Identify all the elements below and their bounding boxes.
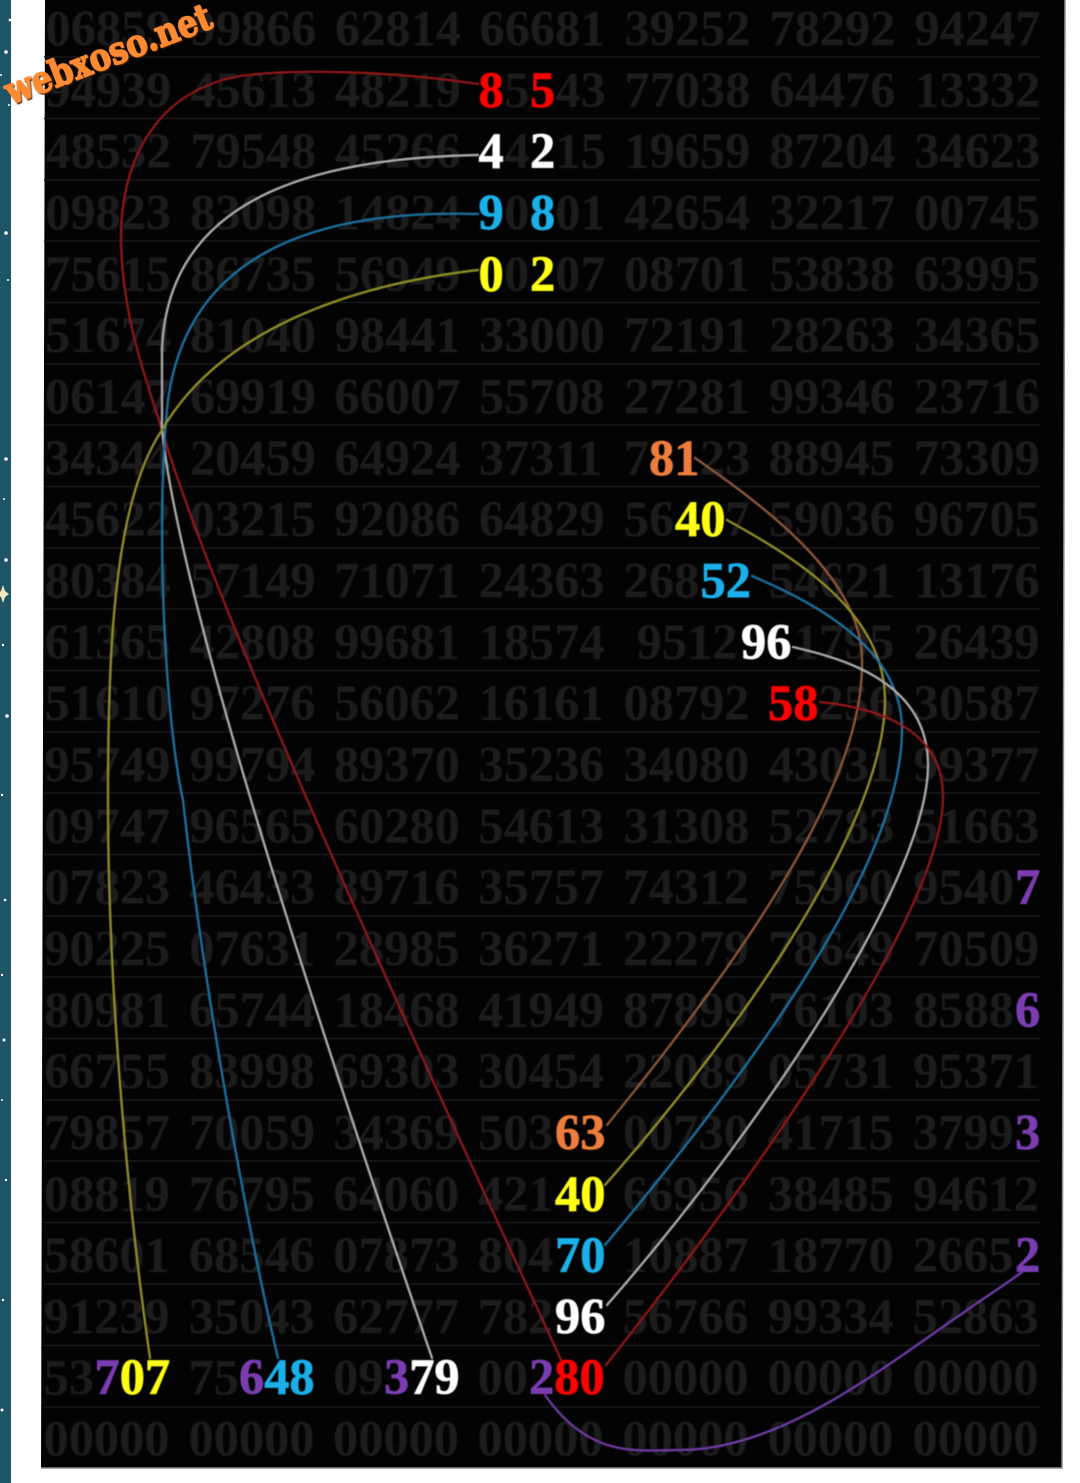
dim background number grid: 62814	[335, 1, 461, 56]
dim background number grid: 00000	[623, 1350, 749, 1405]
middle right group: 81 40 52 96 58: 96	[741, 614, 791, 670]
middle right group: 81 40 52 96 58: 40	[675, 491, 725, 547]
dim background number grid: 61365	[45, 614, 171, 670]
dim background number grid: 804	[478, 1227, 553, 1283]
dim background number grid: 56949	[335, 246, 461, 302]
dim background number grid: 46433	[189, 859, 315, 915]
dim background number grid: 66956	[623, 1166, 749, 1222]
dim background number grid: 00745	[914, 185, 1040, 240]
dim background number grid: 52783	[768, 798, 894, 854]
dim background number grid: 81040	[190, 307, 316, 363]
dim background number grid: 75	[189, 1350, 239, 1405]
dim background number grid: 98441	[334, 307, 461, 363]
dim background number grid: 41949	[478, 982, 604, 1038]
top left group: 8 5 / 4 2 / 9 8 / 0 2: 9	[478, 184, 504, 240]
dim background number grid: 69919	[190, 368, 316, 424]
dim background number grid: 03215	[190, 491, 316, 547]
dim background number grid: 96565	[189, 798, 315, 854]
dim background number grid: 51674	[45, 307, 171, 363]
dim background number grid: 99377	[913, 736, 1039, 792]
dim background number grid: 53838	[769, 246, 895, 302]
top left group: 8 5 / 4 2 / 9 8 / 0 2: 0	[478, 246, 504, 302]
dim background number grid: 8588	[913, 982, 1014, 1038]
dim background number grid: 52863	[913, 1288, 1039, 1344]
dim background number grid: 75960	[768, 859, 894, 915]
dim background number grid: 66755	[44, 1043, 170, 1099]
dim background number grid: 86735	[190, 246, 316, 302]
middle right group: 81 40 52 96 58: 58	[768, 675, 818, 731]
dim background number grid: 28263	[769, 307, 895, 363]
dim background number grid: 15	[555, 123, 606, 179]
dim background number grid: 782	[478, 1288, 553, 1344]
dim background number grid: 06859	[45, 1, 171, 56]
middle right group: 81 40 52 96 58	[649, 430, 818, 731]
curve: yellow 0 to 707	[108, 270, 478, 1358]
dim background number grid: 88945	[769, 430, 895, 486]
dim background number grid: 07873	[333, 1227, 459, 1283]
dim background number grid: 96705	[914, 491, 1040, 547]
dim background number grid: 77038	[624, 62, 750, 118]
dim background number grid: 27281	[624, 368, 750, 424]
dim background number grid: 87204	[769, 123, 895, 179]
dim background number grid: 95371	[913, 1043, 1039, 1099]
right column purple digits: 7 6 3 2: 3	[1015, 1104, 1040, 1160]
teal starry strip at left edge	[0, 0, 11, 1483]
dim background number grid: 60280	[334, 798, 460, 854]
dim background number grid: 22279	[623, 921, 749, 977]
dim background number grid: 13176	[914, 553, 1040, 609]
dim background number grid: 33000	[479, 307, 605, 363]
bottom row group: 707 648 379 280: 280	[529, 1349, 605, 1405]
dim background number grid: 55708	[479, 368, 605, 424]
dim background number grid: 34344	[45, 430, 171, 486]
dim background number grid: 66681	[479, 1, 605, 56]
dim background number grid: 70059	[189, 1104, 315, 1160]
middle right group: 81 40 52 96 58: 81	[649, 430, 699, 486]
dim background number grid: 9512	[637, 614, 737, 670]
dim background number grid: 09747	[44, 798, 170, 854]
bottom row group: 707 648 379 280: 648	[239, 1349, 315, 1405]
dim background number grid: 00000	[767, 1410, 894, 1466]
dim background number grid: 268	[624, 553, 699, 609]
dim background number grid: 23716	[914, 368, 1040, 424]
lower middle group: 63 40 70 96: 40	[555, 1166, 605, 1222]
dim background number grid: 00000	[43, 1410, 170, 1466]
dim background number grid: 503	[478, 1104, 554, 1160]
dim background number grid: 7	[725, 491, 750, 547]
dim background number grid: 94612	[913, 1166, 1039, 1222]
dim background number grid: 08701	[624, 246, 750, 302]
dim background number grid: 20459	[190, 430, 316, 486]
dim background number grid: 30587	[913, 675, 1040, 731]
dim background number grid: 66007	[334, 368, 460, 424]
dim background number grid: 09	[333, 1350, 384, 1405]
dim background number grid: 00000	[912, 1410, 1039, 1466]
dim background number grid: 28985	[334, 921, 460, 977]
dim background number grid: 73309	[914, 430, 1040, 486]
dim background number grid: 78292	[769, 1, 895, 56]
dim background number grid: 54613	[478, 798, 604, 854]
dim background number grid: 0	[504, 185, 529, 240]
dim background number grid: 64924	[334, 430, 460, 486]
dim background number grid: 70509	[913, 921, 1039, 977]
dim background number grid: 92086	[334, 491, 460, 547]
dim background number grid: 43	[555, 62, 606, 118]
dim background number grid: 9540	[913, 859, 1014, 915]
dim background number grid: 90225	[44, 921, 170, 977]
right column purple digits: 7 6 3 2: 2	[1015, 1227, 1040, 1283]
top left group: 8 5 / 4 2 / 9 8 / 0 2: 2	[530, 123, 555, 179]
dim background number grid: 95749	[44, 736, 170, 792]
dim background number grid: 38485	[768, 1166, 894, 1222]
dim background number grid: 00	[478, 1350, 528, 1405]
dim background number grid: 34365	[914, 307, 1040, 363]
dim background number grid: 99346	[769, 368, 895, 424]
dim background number grid: 34080	[623, 736, 749, 792]
dim background number grid: 99794	[189, 736, 315, 792]
dim background number grid: 18574	[479, 614, 605, 670]
dim background number grid: 99866	[190, 1, 316, 56]
dim background number grid: 76795	[189, 1166, 315, 1222]
dim background number grid: 78649	[768, 921, 894, 977]
highlighted digits	[94, 62, 1040, 1405]
dim background number grid: 63995	[914, 246, 1040, 302]
dim background number grid: 08819	[44, 1166, 170, 1222]
dim background number grid: 64476	[769, 62, 895, 118]
dim background number grid: 4	[504, 123, 530, 179]
dim background number grid: 16161	[478, 675, 605, 731]
lower middle group: 63 40 70 96	[555, 1104, 605, 1344]
curve: yellow 40 to 40	[605, 520, 885, 1185]
dim background number grid: 5	[504, 62, 530, 118]
dim background number grid: 99681	[334, 614, 460, 670]
dim background number grid: 18468	[334, 982, 460, 1038]
dim background number grid: 48219	[335, 62, 461, 118]
dim background number grid: 00000	[913, 1350, 1039, 1405]
top left group: 8 5 / 4 2 / 9 8 / 0 2: 8	[478, 62, 504, 118]
top left group: 8 5 / 4 2 / 9 8 / 0 2: 4	[478, 123, 504, 179]
dim background number grid: 26439	[914, 614, 1040, 670]
dim background number grid: 421	[478, 1166, 553, 1222]
dim background number grid: 00000	[768, 1350, 894, 1405]
dim background number grid: 35043	[189, 1288, 315, 1344]
dim background number grid: 74312	[623, 859, 749, 915]
dim background number grid: 07823	[44, 859, 170, 915]
bottom row group: 707 648 379 280: 707	[94, 1349, 170, 1405]
dim background number grid: 34369	[333, 1104, 459, 1160]
dim background number grid: 80981	[44, 982, 170, 1038]
dim background number grid: 07	[555, 246, 606, 302]
dim background number grid: 30454	[478, 1043, 604, 1099]
dim background number grid: 18770	[768, 1227, 894, 1283]
dim background number grid: 68546	[189, 1227, 315, 1283]
dim background number grid: 97276	[189, 675, 316, 731]
dim background number grid: 13332	[914, 62, 1040, 118]
curve: blue 52 to 70	[605, 576, 902, 1245]
right column purple digits: 7 6 3 2: 7	[1015, 859, 1040, 915]
dim background number grid: 54621	[769, 553, 895, 609]
right column purple digits: 7 6 3 2: 6	[1015, 982, 1040, 1038]
dim background number grid: 41715	[768, 1104, 894, 1160]
dim background number grid: 72191	[624, 307, 750, 363]
dim background number grid: 06147	[45, 368, 171, 424]
top left group: 8 5 / 4 2 / 9 8 / 0 2: 5	[530, 62, 555, 118]
dim background number grid: 43031	[768, 736, 894, 792]
dim background number grid: 14824	[335, 185, 461, 240]
dim background number grid: 256	[818, 675, 894, 731]
dim background number grid: 23	[700, 430, 750, 486]
dim background number grid: 00000	[477, 1410, 604, 1466]
curve: purple 2 to 2	[545, 1272, 1022, 1451]
dim background number grid: 56	[624, 491, 674, 547]
dim background number grid: 69303	[333, 1043, 460, 1099]
dim background number grid: 91239	[44, 1288, 170, 1344]
dim background number grid: 94939	[45, 62, 171, 118]
dim background number grid: 1795	[794, 614, 894, 670]
dim background number grid: 65744	[189, 982, 315, 1038]
dim background number grid: 83098	[190, 185, 316, 240]
bottom row group: 707 648 379 280	[94, 1349, 605, 1405]
curve: blue 9 to 648	[162, 214, 478, 1358]
dim background number grid: 07631	[189, 921, 315, 977]
dim background number grid: 57149	[190, 553, 316, 609]
dim background number grid: 24363	[479, 553, 605, 609]
lower middle group: 63 40 70 96: 96	[555, 1288, 605, 1344]
dim background number grid: 7	[624, 430, 649, 486]
dim background number grid: 36271	[478, 921, 604, 977]
curve: orange 81 to 63	[607, 458, 862, 1125]
dim background number grid: 89370	[334, 736, 460, 792]
dim background number grid: 64829	[479, 491, 605, 547]
lower middle group: 63 40 70 96: 63	[555, 1104, 605, 1160]
dim background number grid: 71071	[334, 553, 460, 609]
dim background number grid: 64060	[333, 1166, 459, 1222]
dim background number grid: 22089	[623, 1043, 749, 1099]
dim background number grid: 10887	[623, 1227, 749, 1283]
dim background number grid: 56062	[334, 675, 460, 731]
dim background number grid: 05731	[768, 1043, 894, 1099]
dim background number grid: 45613	[190, 62, 316, 118]
dim background number grid: 00000	[333, 1410, 459, 1466]
dim background number grid: 62777	[333, 1288, 459, 1344]
dim background number grid: 45622	[45, 491, 171, 547]
lower middle group: 63 40 70 96: 70	[555, 1227, 605, 1283]
dim background number grid: 87899	[623, 982, 749, 1038]
dim background number grid: 32217	[769, 185, 895, 240]
dim background number grid: 2665	[913, 1227, 1014, 1283]
dim background number grid: 37311	[479, 430, 602, 486]
dim background number grid: 59036	[769, 491, 895, 547]
curve: red 58 to 80	[606, 702, 943, 1365]
dim background number grid: 83998	[189, 1043, 315, 1099]
dim background number grid: 75615	[45, 246, 171, 302]
dim background number grid: 79548	[190, 123, 316, 179]
dim background number grid: 80384	[45, 553, 171, 609]
dim background number grid: 08792	[623, 675, 750, 731]
top left group: 8 5 / 4 2 / 9 8 / 0 2: 2	[530, 246, 555, 302]
dim background number grid: 99334	[768, 1288, 894, 1344]
dim background number grid: 00000	[188, 1410, 315, 1466]
dim background number grid: 39252	[624, 1, 750, 56]
curve: red 8 to 280	[121, 72, 562, 1362]
dim background number grid: 58601	[44, 1227, 170, 1283]
dim background number grid: 48532	[45, 123, 171, 179]
dim background number grid: 31308	[623, 798, 749, 854]
top left group: 8 5 / 4 2 / 9 8 / 0 2: 8	[530, 184, 555, 240]
right column purple digits: 7 6 3 2	[1015, 859, 1040, 1283]
connecting curves	[108, 72, 1022, 1451]
dim background number grid: 0	[504, 246, 529, 302]
bottom row group: 707 648 379 280: 379	[384, 1349, 460, 1405]
dim background number grid: 51610	[44, 675, 171, 731]
dim background number grid: 00000	[622, 1410, 749, 1466]
dim background number grid: 42654	[624, 185, 750, 240]
dim background number grid: 53	[44, 1350, 94, 1405]
dim background number grid: 01	[555, 185, 606, 240]
dim background number grid: 19659	[624, 123, 750, 179]
dim background number grid: 45266	[335, 123, 461, 179]
dim background number grid: 00730	[623, 1104, 749, 1160]
curve: white 96 to 96	[607, 647, 928, 1305]
top left group: 8 5 / 4 2 / 9 8 / 0 2	[478, 62, 555, 302]
dim background number grid: 94247	[914, 1, 1040, 56]
dim background number grid: 56766	[623, 1288, 749, 1344]
dim background number grid: 89716	[334, 859, 460, 915]
dim background number grid: 35236	[478, 736, 604, 792]
dim background number grid: 3799	[913, 1104, 1014, 1160]
middle right group: 81 40 52 96 58: 52	[700, 552, 751, 608]
curve: white 4 to 379	[162, 155, 478, 1358]
dim background number grid: 42808	[190, 614, 316, 670]
dim background number grid: 51663	[913, 798, 1039, 854]
dim background number grid: 34623	[914, 123, 1040, 179]
dim background number grid: 79857	[44, 1104, 170, 1160]
dim background number grid: 35757	[478, 859, 604, 915]
dim background number grid: 76103	[768, 982, 894, 1038]
dim background number grid: 09823	[45, 185, 171, 240]
